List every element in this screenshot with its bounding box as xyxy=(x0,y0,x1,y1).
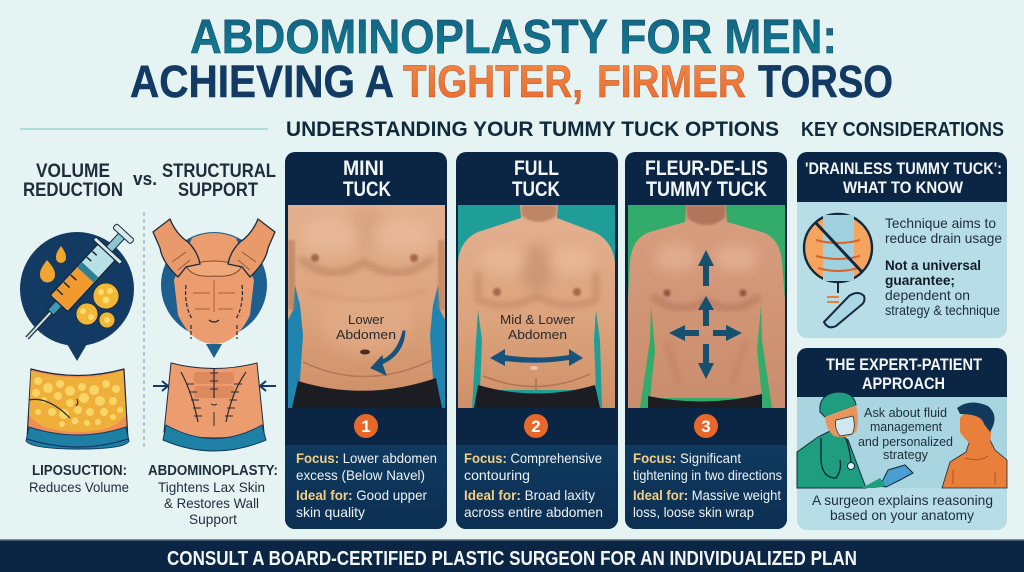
text: ask about fluid management xyxy=(858,405,953,462)
label: mid and lower abdomen: Abdomen xyxy=(508,327,567,342)
label: lower abdomen: Lower xyxy=(348,312,385,327)
caption: liposuction: Reduces Volume xyxy=(29,479,129,495)
text: mini tuck details: Ideal for: Good upper xyxy=(296,487,427,503)
panel: expert-patient approach xyxy=(797,348,1007,530)
label: lower abdomen xyxy=(336,312,396,342)
text: surgeon explains: based on your anatomy xyxy=(830,507,974,523)
heading: drainless tummy tuck: WHAT TO KNOW xyxy=(843,178,964,197)
text: drainless details: strategy & technique xyxy=(885,302,1000,318)
heading: structural support: STRUCTURAL xyxy=(162,161,276,182)
number badge 3 xyxy=(694,414,718,438)
text: ask about fluid management: and personalized xyxy=(858,434,953,449)
panel: volume vs structural comparison xyxy=(14,161,278,527)
number badge 2 xyxy=(524,414,548,438)
text: mini tuck details: skin quality xyxy=(296,504,365,520)
photo: torso, lower abdomen xyxy=(288,205,445,408)
heading: full tuck: TUCK xyxy=(512,178,560,201)
caption: abdominoplasty: Support xyxy=(189,511,237,527)
heading: mini tuck: MINI xyxy=(343,157,384,180)
heading: expert-patient approach: APPROACH xyxy=(862,374,945,393)
icon: syringe in navy bubble xyxy=(14,219,139,361)
number badge 2: 2 xyxy=(531,417,541,436)
heading: structural support: SUPPORT xyxy=(178,180,258,201)
number badge 3: 3 xyxy=(701,417,711,436)
icon: surgeon xyxy=(797,392,913,488)
text: drainless details xyxy=(885,215,1002,318)
text: drainless details: dependent on xyxy=(885,287,970,303)
caption: liposuction xyxy=(29,463,129,495)
caption: abdominoplasty: & Restores Wall xyxy=(164,495,259,511)
arrow: two-way horizontal xyxy=(490,349,583,366)
title: TORSO xyxy=(758,56,893,107)
lower info section xyxy=(456,445,618,529)
text: ask about fluid management: Ask about fluid xyxy=(864,405,947,420)
text: mini tuck details xyxy=(296,450,437,520)
heading: volume reduction xyxy=(23,161,123,201)
photo: torso, mid and lower abdomen xyxy=(458,205,615,408)
heading: fleur-de-lis tummy tuck: FLEUR-DE-LIS xyxy=(645,157,768,180)
text: surgeon explains xyxy=(812,492,993,523)
heading: expert-patient approach xyxy=(826,355,983,393)
text: surgeon explains: A surgeon explains reasoning xyxy=(812,492,993,508)
title: FIRMER xyxy=(597,56,746,107)
icon: hands lifting skin over abdomen xyxy=(153,219,275,358)
text: full tuck details xyxy=(464,450,603,520)
title xyxy=(130,11,893,107)
heading: mini tuck: TUCK xyxy=(343,178,391,201)
icon: patient xyxy=(942,402,1007,488)
text: fleur-de-lis details: Focus: Significant xyxy=(633,450,741,466)
arrow: lower abdomen xyxy=(371,331,405,375)
text: mini tuck details: Focus: Lower abdomen xyxy=(296,450,437,466)
heading: volume reduction: VOLUME xyxy=(36,161,110,182)
text: fleur-de-lis details xyxy=(633,450,782,520)
heading: full tuck xyxy=(512,157,560,201)
icon: crossed-out drain xyxy=(804,214,872,327)
heading: mini tuck xyxy=(343,157,391,201)
title: ABDOMINOPLASTY FOR MEN: xyxy=(190,11,837,64)
icon: fatty abdomen xyxy=(26,369,129,449)
text: ask about fluid management: strategy xyxy=(883,447,928,462)
heading: volume reduction: REDUCTION xyxy=(23,180,123,201)
panel: mini tuck xyxy=(285,152,447,529)
text: drainless details: reduce drain usage xyxy=(885,230,1002,246)
icon: repaired abdomen with sutures xyxy=(163,363,266,451)
text: drainless details: Technique aims to xyxy=(885,215,996,231)
text: full tuck details: contouring xyxy=(464,467,530,483)
panel: full tuck xyxy=(456,152,618,529)
label: mid and lower abdomen xyxy=(500,312,576,342)
text: full tuck details: Ideal for: Broad laxity xyxy=(464,487,595,503)
heading: fleur-de-lis tummy tuck: TUMMY TUCK xyxy=(646,178,767,201)
photo: torso with four direction arrows xyxy=(628,205,785,408)
arrow: squeeze from left xyxy=(153,381,168,391)
heading: full tuck: FULL xyxy=(514,157,559,180)
heading: drainless tummy tuck xyxy=(805,159,1002,197)
text: full tuck details: across entire abdomen xyxy=(464,504,603,520)
number badge 1 xyxy=(354,414,378,438)
text: drainless details: Not a universal xyxy=(885,257,981,273)
panel: fleur-de-lis tummy tuck xyxy=(625,152,787,529)
caption: abdominoplasty xyxy=(148,463,278,527)
text: fleur-de-lis details: loss, loose skin wrap xyxy=(633,504,754,520)
lower info section xyxy=(625,445,787,529)
text: drainless details: guarantee; xyxy=(885,272,955,288)
footer banner xyxy=(0,539,1024,572)
text: fleur-de-lis details: Ideal for: Massive weight xyxy=(633,487,781,503)
label: lower abdomen: Abdomen xyxy=(336,327,396,342)
caption: abdominoplasty: Tightens Lax Skin xyxy=(158,479,265,495)
vs label: vs. xyxy=(133,169,157,189)
label: mid and lower abdomen: Mid & Lower xyxy=(500,312,576,327)
caption: abdominoplasty: ABDOMINOPLASTY: xyxy=(148,463,278,479)
heading: expert-patient approach: THE EXPERT-PATIENT xyxy=(826,355,983,374)
number badge 1: 1 xyxy=(361,417,371,436)
arrows: four directions xyxy=(669,250,742,379)
text: full tuck details: Focus: Comprehensive xyxy=(464,450,602,466)
caption: liposuction: LIPOSUCTION: xyxy=(32,463,127,479)
heading: tummy tuck options: UNDERSTANDING YOUR TUMMY TUCK OPTIONS xyxy=(286,118,779,141)
heading: fleur-de-lis tummy tuck xyxy=(645,157,768,201)
heading: structural support xyxy=(162,161,276,201)
text: ask about fluid management: management xyxy=(870,419,942,434)
lower info section xyxy=(285,445,447,529)
arrow: squeeze from right xyxy=(260,381,276,391)
title: TIGHTER, xyxy=(403,56,583,107)
panel: drainless tummy tuck xyxy=(797,152,1007,338)
heading: key considerations: KEY CONSIDERATIONS xyxy=(801,119,1004,141)
footer banner: CONSULT A BOARD-CERTIFIED PLASTIC SURGEON FOR AN INDIVIDUALIZED PLAN xyxy=(167,548,857,570)
title: ACHIEVING A xyxy=(130,56,394,107)
text: fleur-de-lis details: tightening in two directions xyxy=(633,467,782,483)
text: mini tuck details: excess (Below Navel) xyxy=(296,467,425,483)
